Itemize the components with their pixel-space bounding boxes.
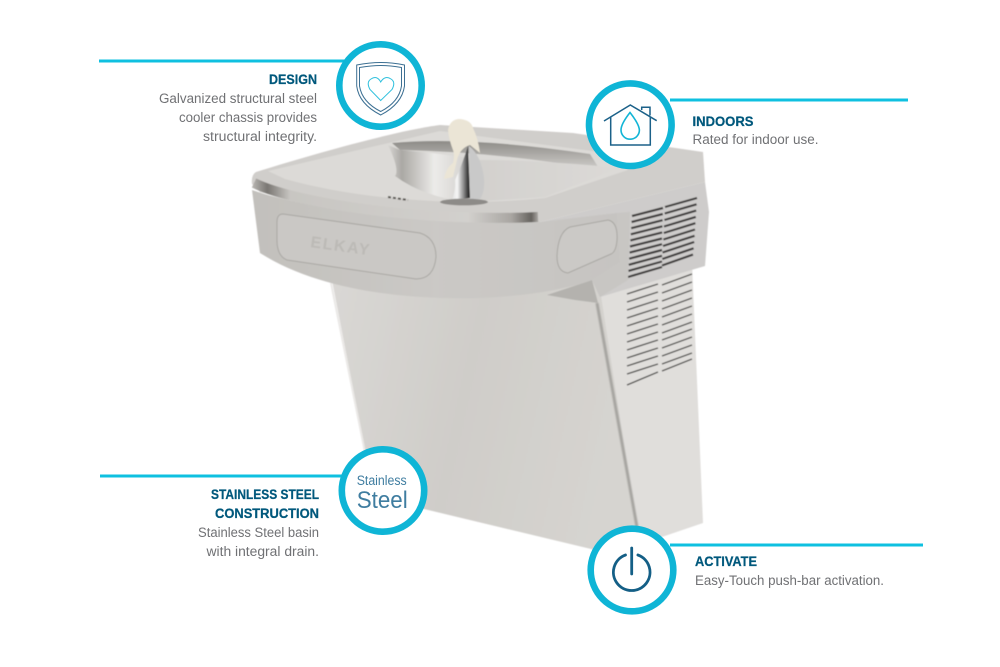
upper vents: [628, 198, 697, 277]
bubbler: [440, 119, 488, 205]
text: design: Galvanized structural steel: [159, 91, 317, 106]
icon: shield with heart: [357, 62, 404, 115]
text: design: cooler chassis provides: [179, 110, 317, 125]
callout: stainless steel construction: [100, 449, 424, 559]
chrome rim: [254, 183, 538, 218]
badge circle: design: [339, 44, 422, 127]
product: drinking fountain: [252, 119, 709, 554]
text: stainless steel: [198, 525, 319, 559]
leader line: stainless steel: [100, 474, 344, 478]
logo text: ELKAY: [309, 234, 372, 259]
heading: indoors: INDOORS: [692, 114, 754, 129]
front shroud: [252, 190, 620, 298]
heading: activate: ACTIVATE: [695, 554, 757, 569]
leader line: activate: [670, 544, 923, 546]
badge circle: indoors: [589, 83, 672, 166]
icon: power symbol: [613, 548, 650, 591]
drain: [388, 197, 408, 200]
bubbler teardrop: [469, 146, 484, 199]
right push plate: [557, 220, 617, 273]
text: design: structural integrity.: [203, 129, 317, 144]
cabinet side panel: [592, 262, 703, 554]
icon: house with water drop: [604, 105, 657, 145]
leader line: indoors: [670, 98, 908, 102]
badge text: stainless steel: [357, 473, 408, 514]
callout: indoors: [589, 83, 908, 166]
text: design: [159, 91, 317, 144]
upper side housing: [540, 182, 709, 297]
badge text: stainless steel: Stainless: [357, 473, 407, 488]
bubbler base: [440, 199, 488, 205]
text: indoors: Rated for indoor use.: [692, 132, 818, 147]
badge circle: activate: [591, 529, 673, 611]
back rim shadow: [392, 141, 600, 170]
basin top deck: [252, 125, 705, 222]
left name plate: [277, 214, 436, 279]
basin interior: [268, 131, 628, 202]
heading: design: DESIGN: [269, 72, 317, 87]
bracket under shroud: [547, 280, 598, 303]
badge circle: stainless steel: [342, 449, 424, 532]
basin bowl: [388, 145, 620, 202]
bubbler chrome stem: [452, 146, 470, 200]
cream guard: [444, 119, 480, 179]
callout: activate: [591, 529, 923, 611]
leader line: design: [99, 60, 349, 62]
heading: stainless steel construction: CONSTRUCTION: [215, 506, 319, 521]
lower vents: [627, 274, 692, 385]
heading: stainless steel construction: STAINLESS STEEL: [211, 487, 319, 502]
badge text: stainless steel: Steel: [357, 487, 408, 514]
text: stainless steel: Stainless Steel basin: [198, 525, 319, 540]
text: stainless steel: with integral drain.: [205, 544, 319, 559]
text: activate: Easy-Touch push-bar activation.: [695, 573, 884, 588]
heading: stainless steel construction: [211, 487, 319, 521]
cabinet front panel: [330, 270, 637, 554]
callout: design: [99, 44, 422, 144]
